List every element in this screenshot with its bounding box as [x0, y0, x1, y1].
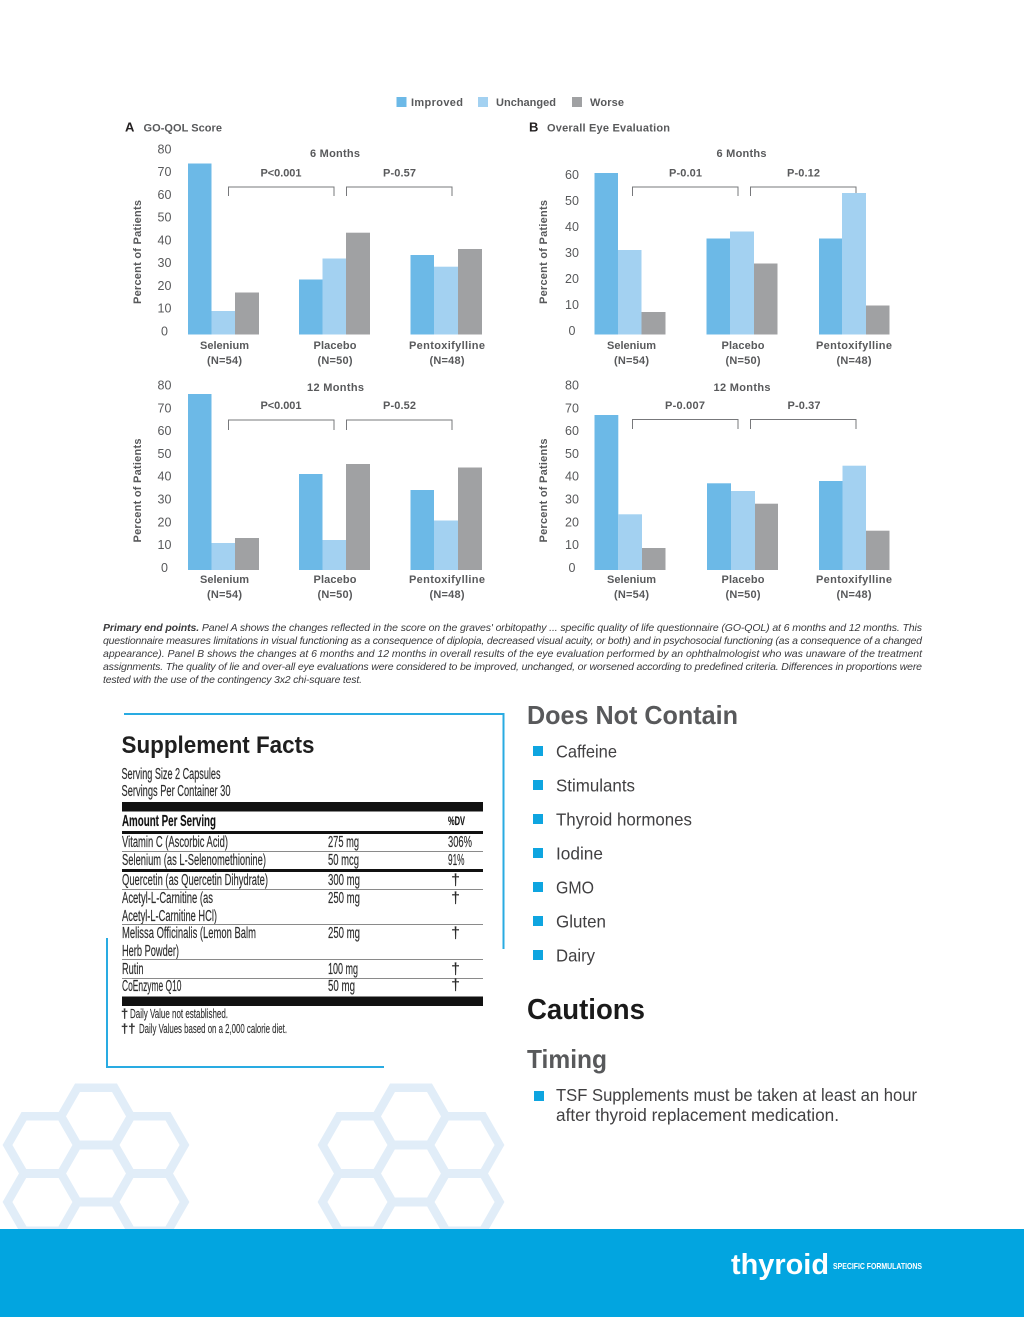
chart: panel B 6 months: (N=48): [836, 355, 872, 367]
chart: panel B 12 months: P-0.007: [665, 400, 705, 412]
chart caption: [103, 622, 923, 686]
facts table: Acetyl-L-Carnitine HCl): [122, 908, 217, 925]
logo: thyroid: [731, 1249, 829, 1281]
chart: panel B 6 months: 0: [569, 324, 576, 338]
facts table: Quercetin (as Quercetin Dihydrate): [122, 872, 268, 889]
chart: panel B 6 months: 20: [565, 272, 579, 286]
chart: panel A 6 months: (N=54): [207, 355, 242, 367]
chart: panel B 6 months: Pentoxifylline: [816, 340, 892, 352]
chart: panel B 6 months: P-0.01: [669, 168, 702, 180]
chart: panel B 12 months: Selenium: [607, 574, 656, 586]
chart: panel A 6 months: (N=50): [318, 355, 353, 367]
chart: panel B 12 months: Pentoxifylline: [816, 574, 892, 586]
chart: panel A 6 months: [132, 142, 485, 367]
chart: panel B 6 months: (N=50): [726, 355, 761, 367]
chart: panel B 12 months: 12 Months: [714, 382, 770, 394]
chart: panel B 6 months: 10: [565, 298, 579, 312]
chart: panel A 12 months: 40: [158, 470, 171, 484]
chart: panel A 12 months: 12 Months: [307, 382, 364, 394]
footer band: [0, 1229, 1024, 1317]
chart caption: assignments. The quality of lie and over-all eye evaluations were considered to be improved, unchanged, or worsened according to predefined criteria. Differences in proportions were: [103, 661, 922, 673]
chart: panel B 12 months: Placebo: [722, 574, 765, 586]
panel B heading: Overall Eye Evaluation: [547, 122, 670, 134]
chart: panel B 6 months: Percent of Patients: [538, 200, 550, 304]
chart: panel A 6 months: 30: [158, 256, 171, 270]
chart: panel A 12 months: 60: [158, 424, 171, 438]
chart: panel B 12 months: 60: [565, 424, 579, 438]
chart: panel B 6 months: 40: [565, 220, 579, 234]
chart: panel A 6 months: P<0.001: [260, 168, 302, 180]
chart: panel B 6 months: Placebo: [722, 340, 765, 352]
chart: panel B 12 months: 30: [565, 492, 579, 506]
chart: panel A 12 months: 70: [158, 401, 171, 415]
heading: timing: Timing: [527, 1044, 607, 1074]
honeycomb pattern left: [8, 1088, 184, 1259]
chart caption: tested with the use of the contingency 3x2 chi-square test.: [103, 674, 362, 686]
chart: panel B 12 months: Percent of Patients: [538, 438, 550, 542]
chart: panel A 12 months: (N=50): [318, 589, 353, 601]
chart: panel B 6 months: 30: [565, 246, 579, 260]
table footnotes: Daily Values based on a 2,000 calorie diet.: [139, 1021, 287, 1036]
chart: panel A 12 months: Selenium: [200, 574, 249, 586]
list: does not contain: Stimulants: [556, 776, 635, 796]
chart: panel A 12 months: 20: [158, 515, 171, 529]
chart: panel B 6 months: P-0.12: [787, 168, 820, 180]
table footnotes: ††: [121, 1021, 135, 1036]
chart: panel B 6 months: (N=54): [614, 355, 649, 367]
chart: panel A 6 months: P-0.57: [383, 168, 416, 180]
chart: panel A 6 months: 80: [158, 142, 171, 156]
list: does not contain: Caffeine: [556, 742, 617, 762]
timing note: [534, 1085, 917, 1125]
facts table: 250 mg: [328, 925, 360, 942]
chart: panel A 12 months: P<0.001: [260, 400, 302, 412]
logo: SPECIFIC FORMULATIONS: [833, 1261, 922, 1271]
chart: panel A 6 months: 0: [161, 324, 168, 338]
chart: panel A 6 months: 40: [158, 234, 171, 248]
logo: [731, 1249, 922, 1281]
chart: panel A 6 months: Selenium: [200, 340, 249, 352]
chart: panel A 12 months: Pentoxifylline: [409, 574, 485, 586]
facts table: Acetyl-L-Carnitine (as: [122, 890, 213, 907]
chart: panel A 12 months: 30: [158, 492, 171, 506]
chart: panel A 12 months: 50: [158, 447, 171, 461]
facts table: Melissa Officinalis (Lemon Balm: [122, 925, 256, 942]
facts table: †: [451, 925, 460, 942]
facts table: †: [451, 890, 460, 907]
facts table: 250 mg: [328, 890, 360, 907]
chart: panel A 6 months: 10: [158, 302, 171, 316]
panel A heading: [125, 120, 222, 134]
chart: panel B 6 months: 50: [565, 194, 579, 208]
chart: panel A 12 months: Percent of Patients: [132, 438, 144, 542]
panel A heading: A: [125, 120, 135, 134]
facts table: 50 mg: [328, 978, 355, 995]
chart: panel B 6 months: 6 Months: [716, 148, 766, 160]
facts table: Rutin: [122, 961, 144, 978]
chart: panel B 12 months: (N=48): [836, 589, 872, 601]
chart: panel A 6 months: (N=48): [430, 355, 465, 367]
chart: panel B 12 months: 20: [565, 515, 579, 529]
chart: panel B 12 months: 0: [569, 561, 576, 575]
chart: panel A 6 months: Percent of Patients: [132, 200, 144, 304]
list: does not contain: [533, 742, 692, 966]
chart legend: [396, 97, 624, 109]
chart: panel A 6 months: 70: [158, 165, 171, 179]
chart: panel A 12 months: (N=48): [430, 589, 465, 601]
chart: panel A 6 months: 60: [158, 188, 171, 202]
chart: panel B 12 months: 40: [565, 470, 579, 484]
panel B heading: [529, 120, 670, 134]
chart: panel B 12 months: 70: [565, 401, 579, 415]
list: does not contain: Dairy: [556, 946, 595, 966]
chart legend: Worse: [590, 97, 624, 109]
chart: panel A 6 months: 6 Months: [310, 148, 360, 160]
timing note: TSF Supplements must be taken at least an hour: [556, 1085, 917, 1105]
chart: panel B 12 months: 80: [565, 378, 579, 392]
facts table: †: [451, 977, 460, 994]
facts table: Selenium (as L-Selenomethionine): [122, 852, 266, 869]
chart: panel A 12 months: [132, 378, 485, 601]
chart: panel A 12 months: 0: [161, 561, 168, 575]
serving info: Servings Per Container 30: [122, 783, 231, 800]
chart: panel B 6 months: 60: [565, 168, 579, 182]
chart caption: Primary end points. Panel A shows the changes reflected in the score on the graves' orbitopathy ... specific quality of life questionnaire (GO-QOL) at 6 months and 12 months. This: [103, 622, 923, 634]
table footnotes: Daily Value not established.: [130, 1006, 228, 1021]
heading: cautions: Cautions: [527, 994, 645, 1026]
chart: panel B 6 months: [538, 148, 892, 367]
panel: supplement facts: [107, 714, 504, 1067]
chart: panel B 12 months: (N=50): [726, 589, 761, 601]
timing note: after thyroid replacement medication.: [556, 1105, 839, 1125]
facts table: Amount Per Serving: [122, 813, 216, 830]
list: does not contain: Thyroid hormones: [556, 810, 692, 830]
chart: panel A 12 months: Placebo: [314, 574, 357, 586]
chart: panel B 12 months: 10: [565, 538, 579, 552]
honeycomb pattern right: [322, 1088, 500, 1259]
list: does not contain: Iodine: [556, 844, 603, 864]
chart: panel B 12 months: [538, 378, 892, 601]
chart: panel A 6 months: 20: [158, 279, 171, 293]
facts table: 50 mcg: [328, 852, 359, 869]
chart: panel A 12 months: P-0.52: [383, 400, 416, 412]
chart caption: appearance). Panel B shows the changes at 6 months and 12 months in overall results of the eye evaluation performed by an ophthalmologist who was unaware of the treatment: [103, 648, 923, 660]
chart: panel B 12 months: P-0.37: [788, 400, 820, 412]
facts table: %DV: [448, 814, 465, 828]
chart caption: questionnaire measures limitations in visual functioning as a consequence of diplopia, decreased visual acuity, or both) and in psychosocial functioning (as a consequence of a changed: [103, 635, 923, 647]
panel B heading: B: [529, 120, 538, 134]
chart legend: Unchanged: [496, 97, 556, 109]
chart: panel B 12 months: 50: [565, 447, 579, 461]
chart: panel A 12 months: (N=54): [207, 589, 242, 601]
chart legend: Improved: [411, 97, 463, 109]
list: does not contain: Gluten: [556, 912, 606, 932]
chart: panel A 6 months: Pentoxifylline: [409, 340, 485, 352]
list: does not contain: GMO: [556, 878, 594, 898]
chart: panel B 12 months: (N=54): [614, 589, 649, 601]
chart: panel B 6 months: Selenium: [607, 340, 656, 352]
chart: panel A 6 months: Placebo: [314, 340, 357, 352]
facts table: †: [451, 961, 460, 978]
table footnotes: [121, 1006, 287, 1036]
panel A heading: GO-QOL Score: [144, 122, 222, 134]
facts table: [122, 802, 483, 1006]
chart: panel A 12 months: 10: [158, 538, 171, 552]
facts table: 100 mg: [328, 961, 358, 978]
serving info: [122, 766, 231, 800]
supplement facts title: Supplement Facts: [122, 732, 314, 759]
heading: does not contain: Does Not Contain: [527, 700, 738, 730]
facts table: Herb Powder): [122, 943, 179, 960]
facts table: 275 mg: [328, 834, 359, 851]
chart: panel A 6 months: 50: [158, 211, 171, 225]
facts table: 306%: [448, 834, 472, 851]
chart: panel A 12 months: 80: [158, 378, 171, 392]
facts table: CoEnzyme Q10: [122, 978, 182, 995]
facts table: 91%: [448, 852, 465, 869]
facts table: †: [451, 872, 460, 889]
facts table: 300 mg: [328, 872, 360, 889]
facts table: Vitamin C (Ascorbic Acid): [122, 834, 228, 851]
serving info: Serving Size 2 Capsules: [122, 766, 221, 783]
table footnotes: †: [121, 1006, 128, 1021]
